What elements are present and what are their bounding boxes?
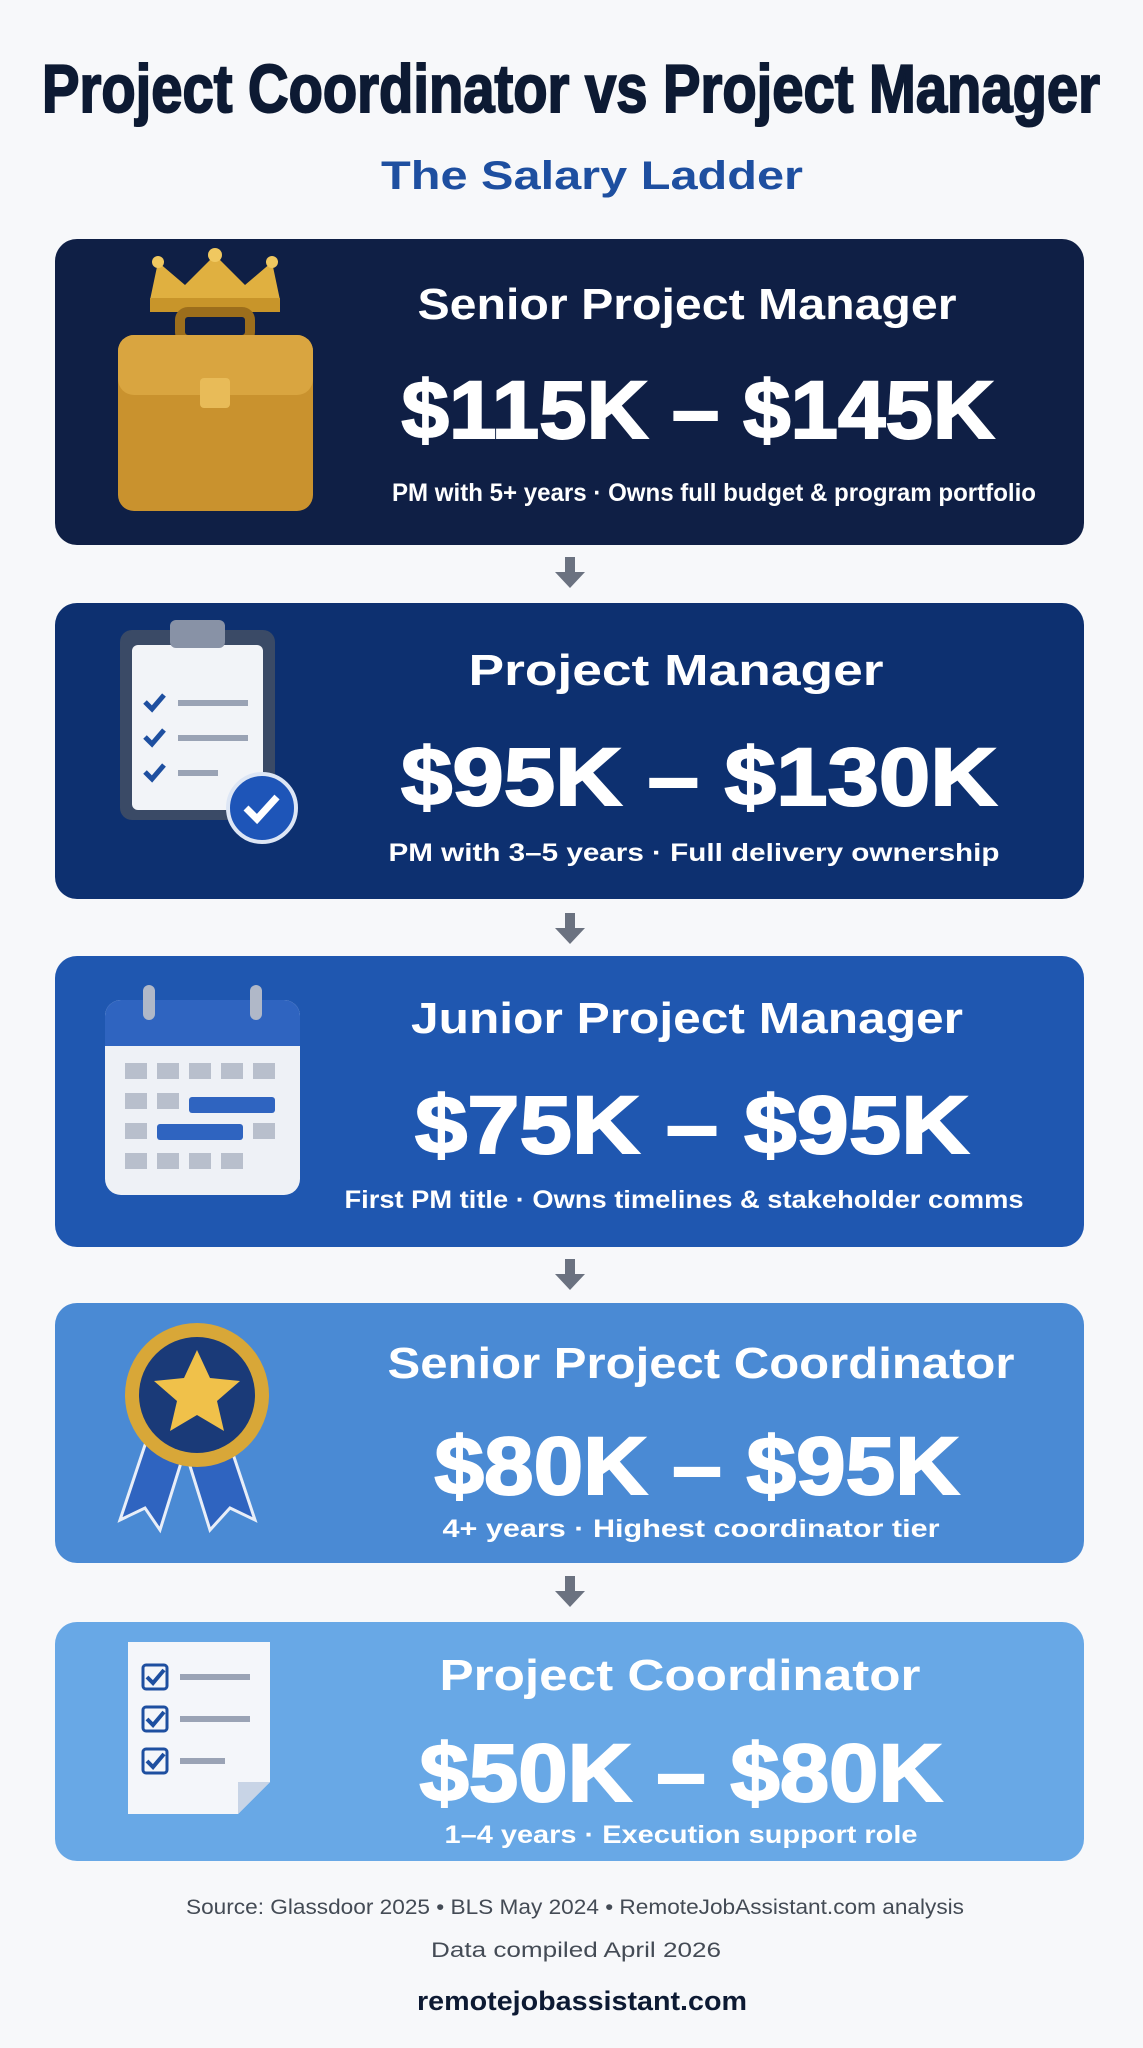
description: 1–4 years · Execution support role <box>444 1821 918 1849</box>
salary: $115K – $145K <box>402 365 994 456</box>
website: remotejobassistant.com <box>417 1986 747 2016</box>
arrow <box>555 913 585 944</box>
icon: calendar <box>105 985 300 1195</box>
description: First PM title · Owns timelines & stakeholder comms <box>344 1186 1024 1214</box>
salary: $95K – $130K <box>401 732 997 823</box>
panel: senior project manager <box>55 239 1084 545</box>
description: PM with 3–5 years · Full delivery ownership <box>388 839 1000 867</box>
icon: clipboard <box>120 620 296 842</box>
arrow <box>555 557 585 588</box>
icon: checklist paper <box>128 1642 270 1814</box>
icon: medal <box>120 1323 269 1530</box>
arrow <box>555 1576 585 1607</box>
subtitle: The Salary Ladder <box>381 154 803 198</box>
role: Senior Project Coordinator <box>388 1339 1015 1388</box>
arrow <box>555 1259 585 1290</box>
panel: project coordinator <box>55 1622 1084 1861</box>
salary: $75K – $95K <box>415 1080 969 1171</box>
salary: $50K – $80K <box>420 1728 942 1819</box>
salary: $80K – $95K <box>434 1421 960 1512</box>
description: PM with 5+ years · Owns full budget & program portfolio <box>392 479 1036 507</box>
panel: senior project coordinator <box>55 1303 1084 1563</box>
panel: junior project manager <box>55 956 1084 1247</box>
compiled date: Data compiled April 2026 <box>431 1939 721 1962</box>
description: 4+ years · Highest coordinator tier <box>442 1515 940 1543</box>
role: Project Coordinator <box>440 1651 920 1700</box>
source text: Source: Glassdoor 2025 • BLS May 2024 • RemoteJobAssistant.com analysis <box>186 1896 964 1919</box>
panel: project manager <box>55 603 1084 899</box>
icon: crown briefcase <box>118 248 313 511</box>
role: Senior Project Manager <box>418 280 956 329</box>
role: Project Manager <box>468 646 884 695</box>
role: Junior Project Manager <box>411 994 963 1043</box>
